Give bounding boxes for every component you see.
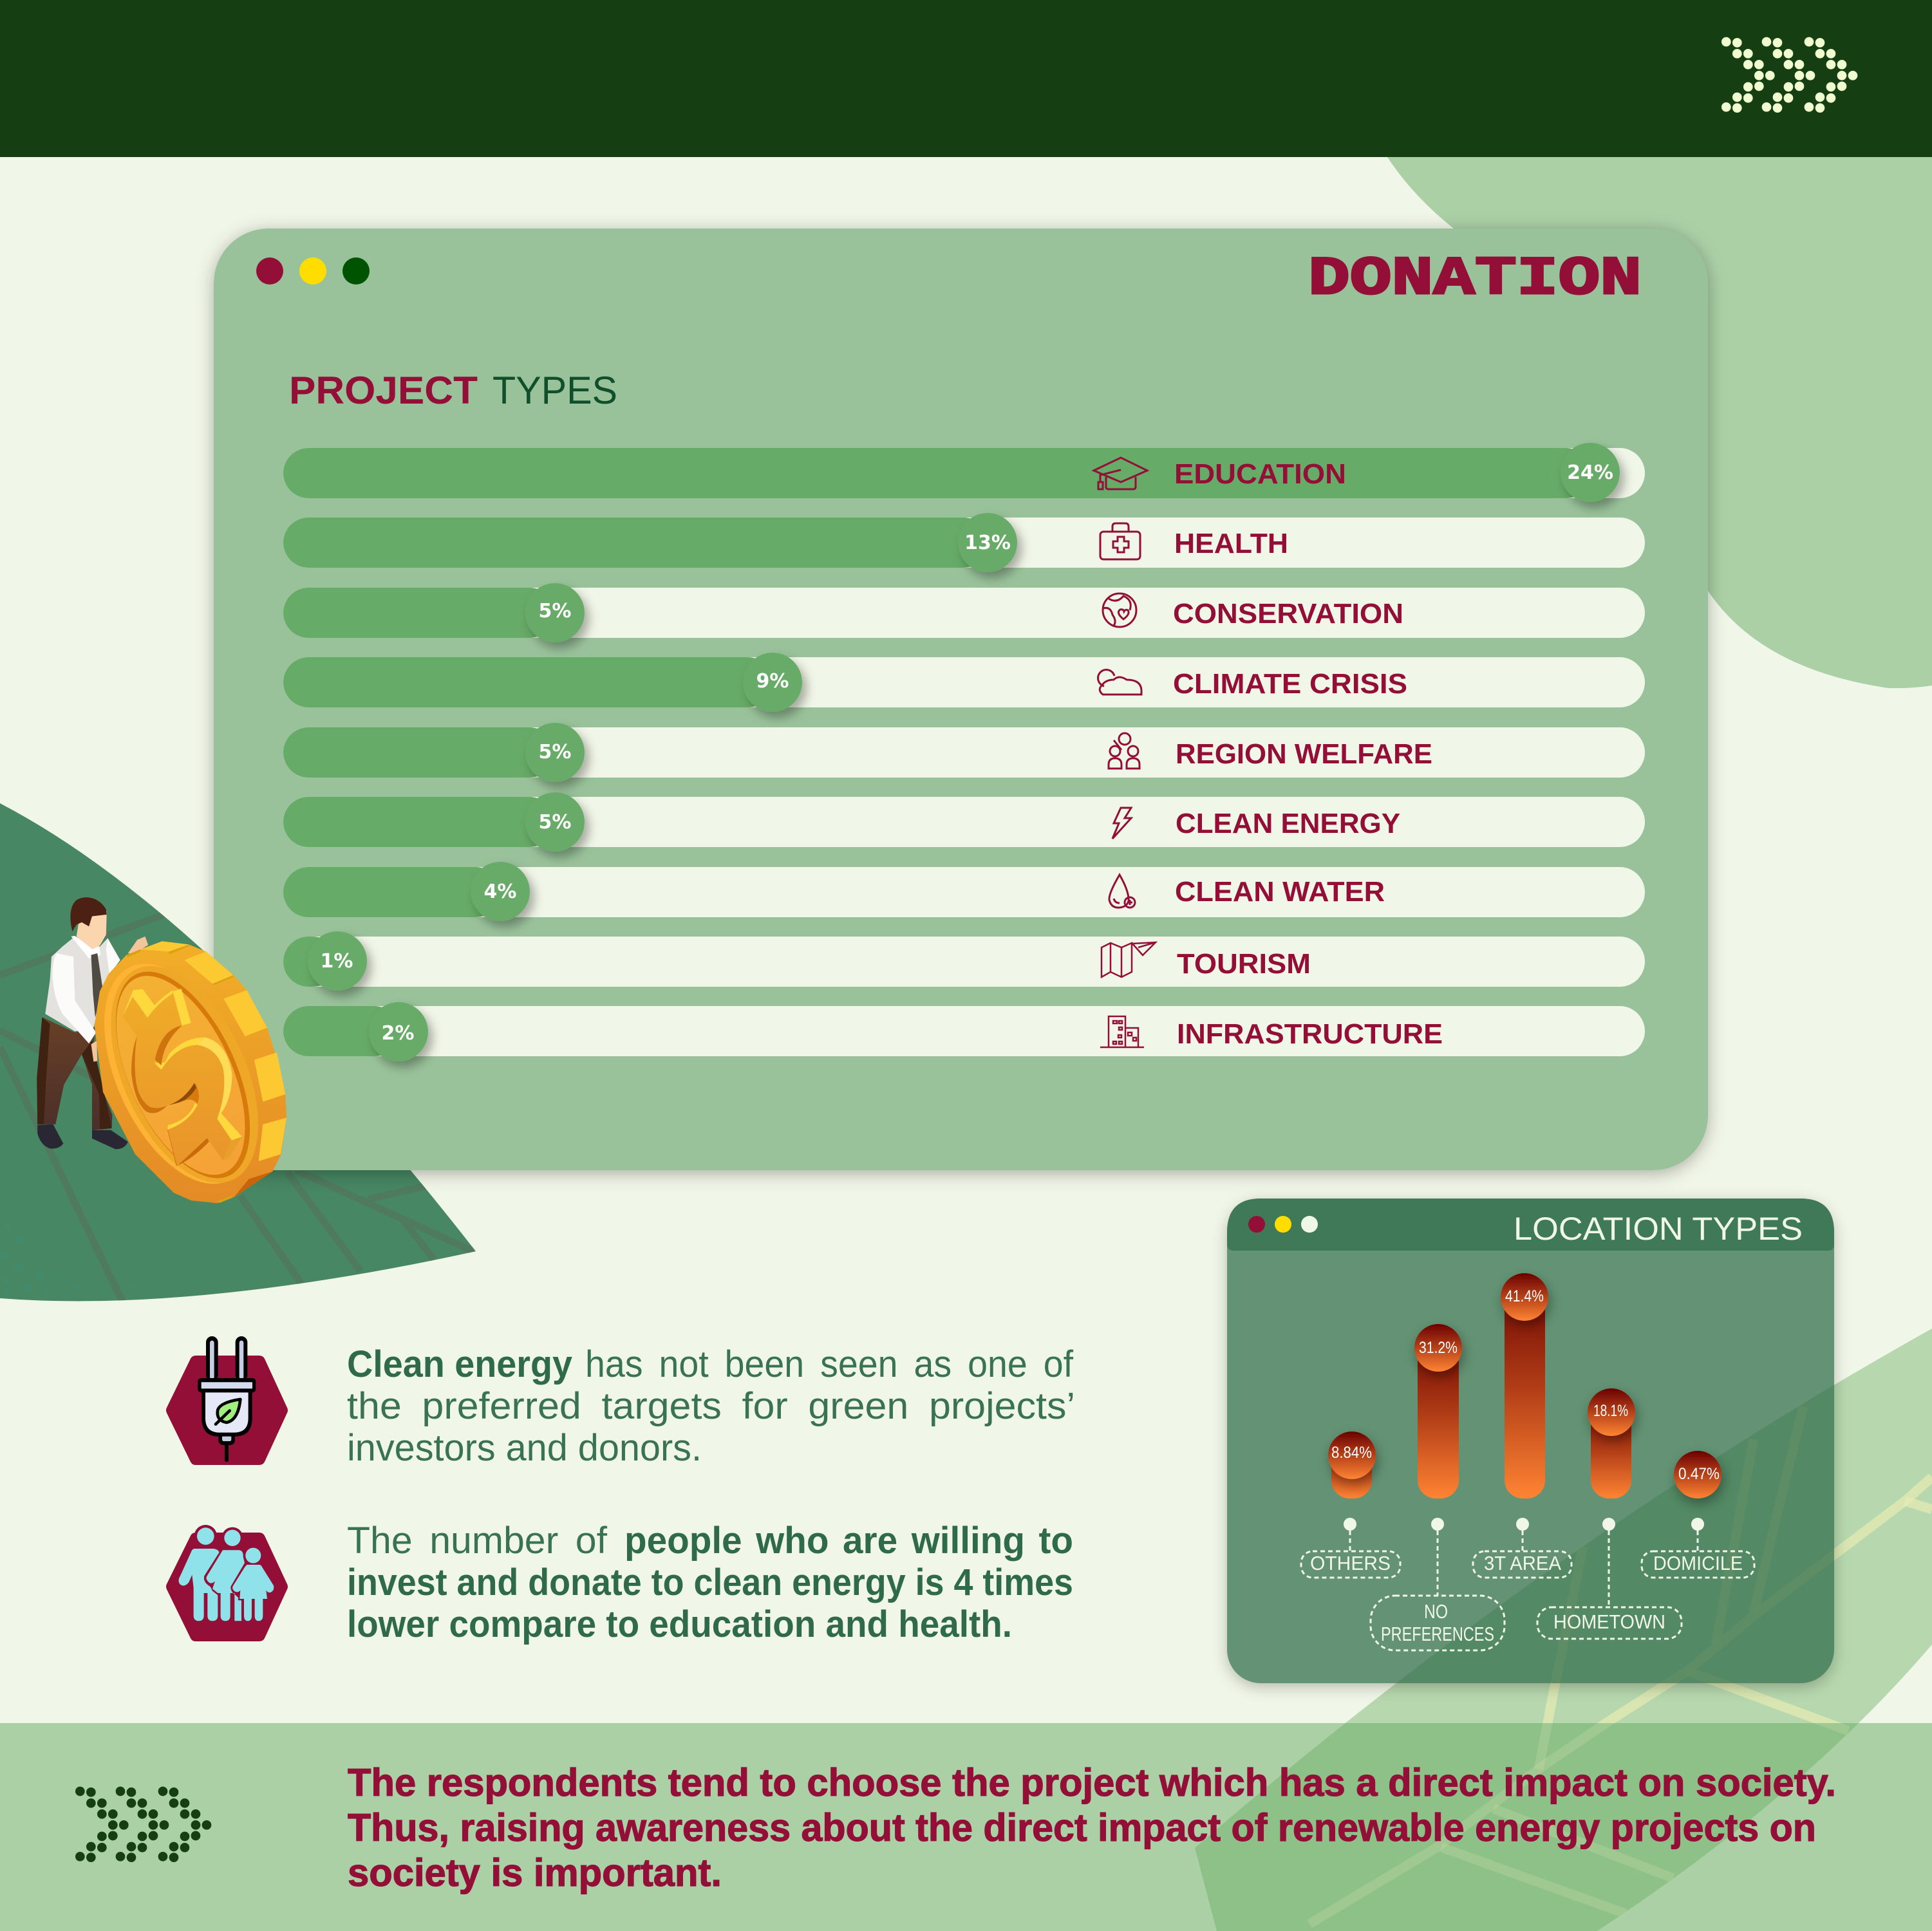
bar: clean energy [283,792,1645,852]
icon: graduation cap [1094,458,1147,489]
bar: education [283,443,1645,502]
takeaway text: society is important. [348,1851,722,1894]
icon: buildings [1100,1016,1144,1047]
text block: clean energy: has not been seen as one of [585,1343,1074,1385]
logo: dark dotted arrows [75,1787,211,1862]
icon: family on hexagon [172,1525,282,1636]
column: no preferences: PREFERENCES [1381,1623,1494,1645]
text block: people willing to invest: lower compare to education and health. [347,1603,1012,1645]
takeaway text: The respondents tend to choose the project which has a direct impact on society. [348,1761,1836,1804]
bar: climate crisis [283,653,1645,712]
column: 3t area: 41.4% [1505,1287,1544,1305]
banner: bottom takeaway background [0,1723,1932,1931]
bar: clean energy: 5% [539,811,571,834]
bar: conservation: CONSERVATION [1173,598,1403,630]
column: 3t area: 3T AREA [1484,1552,1561,1574]
column: no preferences [1371,1324,1505,1650]
column: 3t area [1473,1273,1571,1578]
text block: people willing to invest [347,1520,1073,1645]
text block: clean energy: the preferred targets for green projects’ [347,1385,1075,1427]
text block: clean energy [347,1343,1075,1469]
bar: clean water: 4% [484,881,516,903]
bar: conservation: 5% [539,600,571,622]
dollar sign [123,989,242,1166]
decorative bottom-right leaf [1195,1329,1932,1931]
text block: people willing to invest: people who are willing to [624,1520,1073,1562]
takeaway text: Thus, raising awareness about the direct impact of renewable energy projects on [348,1806,1816,1849]
panel header [1227,1199,1834,1251]
icon: cloud [1098,669,1141,695]
bar: tourism: TOURISM [1177,948,1311,980]
illustration: man pushing coin [37,897,288,1207]
icon: lightning bolt [1112,808,1131,839]
window dots [256,257,370,285]
bar: clean energy: CLEAN ENERGY [1176,808,1400,839]
panel: donation project types [214,229,1708,1170]
decorative corner shape [1387,157,1932,688]
icon: plug on hexagon [172,1336,282,1460]
takeaway text [348,1761,1836,1894]
man [37,897,148,1149]
bar: conservation [283,583,1645,642]
bar: climate crisis: CLIMATE CRISIS [1173,668,1407,700]
coin [73,941,288,1207]
text block: clean energy: Clean energy [347,1343,572,1385]
bar: health [283,513,1645,572]
column: domicile: DOMICILE [1653,1552,1743,1574]
bar: clean water [283,862,1645,921]
icon: water drop [1109,875,1135,908]
icon: people group [1109,733,1140,769]
bar: tourism [283,931,1645,991]
column: hometown: 18.1% [1593,1402,1628,1420]
column: others [1301,1432,1400,1578]
text block: people willing to invest: invest and donate to clean energy is 4 times [347,1562,1073,1603]
heading: location types: LOCATION TYPES [1514,1211,1803,1247]
heading: donation: DONATION [1308,249,1642,310]
heading: project types: PROJECT [289,369,478,412]
bar: infrastructure: 2% [382,1022,414,1045]
icon: globe with heart [1103,593,1136,627]
bar: region welfare: 5% [539,741,571,763]
header band [0,0,1932,157]
left dark green leaf [0,803,476,1303]
column: no preferences: 31.2% [1419,1339,1458,1357]
column: domicile: 0.47% [1678,1465,1720,1483]
column: others: OTHERS [1310,1552,1391,1574]
logo: white dotted arrows [1721,37,1857,113]
column: hometown: HOMETOWN [1553,1610,1665,1633]
icon: first aid kit [1100,523,1140,559]
bar: region welfare: REGION WELFARE [1176,738,1432,770]
text block: clean energy: investors and donors. [347,1427,702,1469]
icon: map with paper plane [1102,942,1156,977]
bar: region welfare [283,723,1645,782]
bar: climate crisis: 9% [756,670,789,693]
bar: tourism: 1% [321,950,353,973]
column: hometown [1537,1388,1682,1639]
column: no preferences: NO [1424,1600,1448,1623]
panel: location types [1227,1199,1834,1683]
heading: project types [289,369,617,412]
bar: health: HEALTH [1174,528,1288,559]
window dots [1248,1216,1318,1233]
heading: project types: TYPES [492,369,617,412]
text block: people willing to invest: The number of [347,1520,608,1562]
column: domicile [1642,1451,1754,1578]
bar: education: 24% [1567,462,1613,484]
bar: education: EDUCATION [1174,458,1346,490]
column: others: 8.84% [1331,1444,1372,1462]
bar: infrastructure [283,1002,1645,1061]
bar: clean water: CLEAN WATER [1175,876,1385,908]
bar: health: 13% [964,532,1011,554]
bar: infrastructure: INFRASTRUCTURE [1177,1018,1443,1050]
